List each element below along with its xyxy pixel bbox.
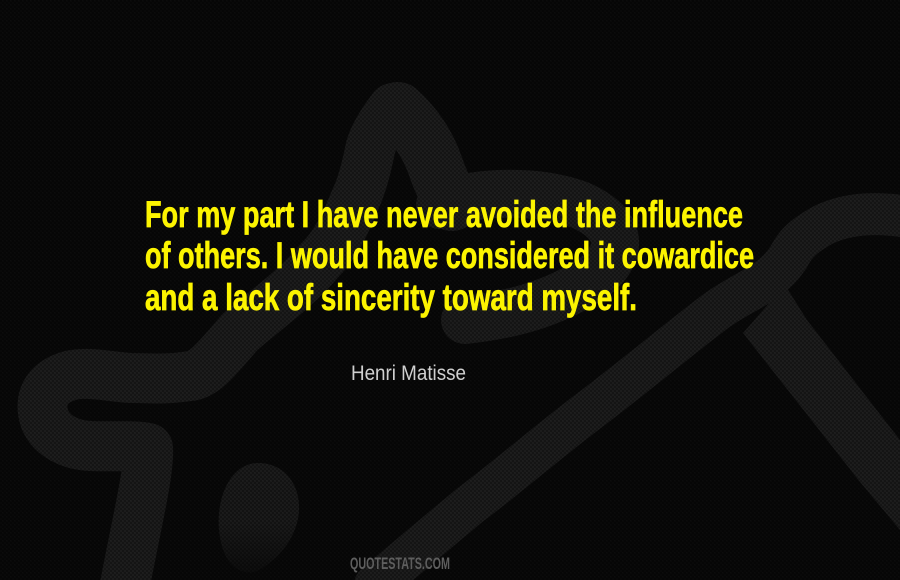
author: Henri Matisse — [351, 362, 466, 385]
quote text: and a lack of sincerity toward myself. — [145, 277, 637, 318]
background calligraphic shapes — [42, 108, 900, 580]
right diagonal branch — [743, 285, 900, 530]
watermark: QUOTESTATS.COM — [350, 554, 450, 573]
lower blob — [219, 463, 299, 572]
quote text — [145, 194, 754, 318]
